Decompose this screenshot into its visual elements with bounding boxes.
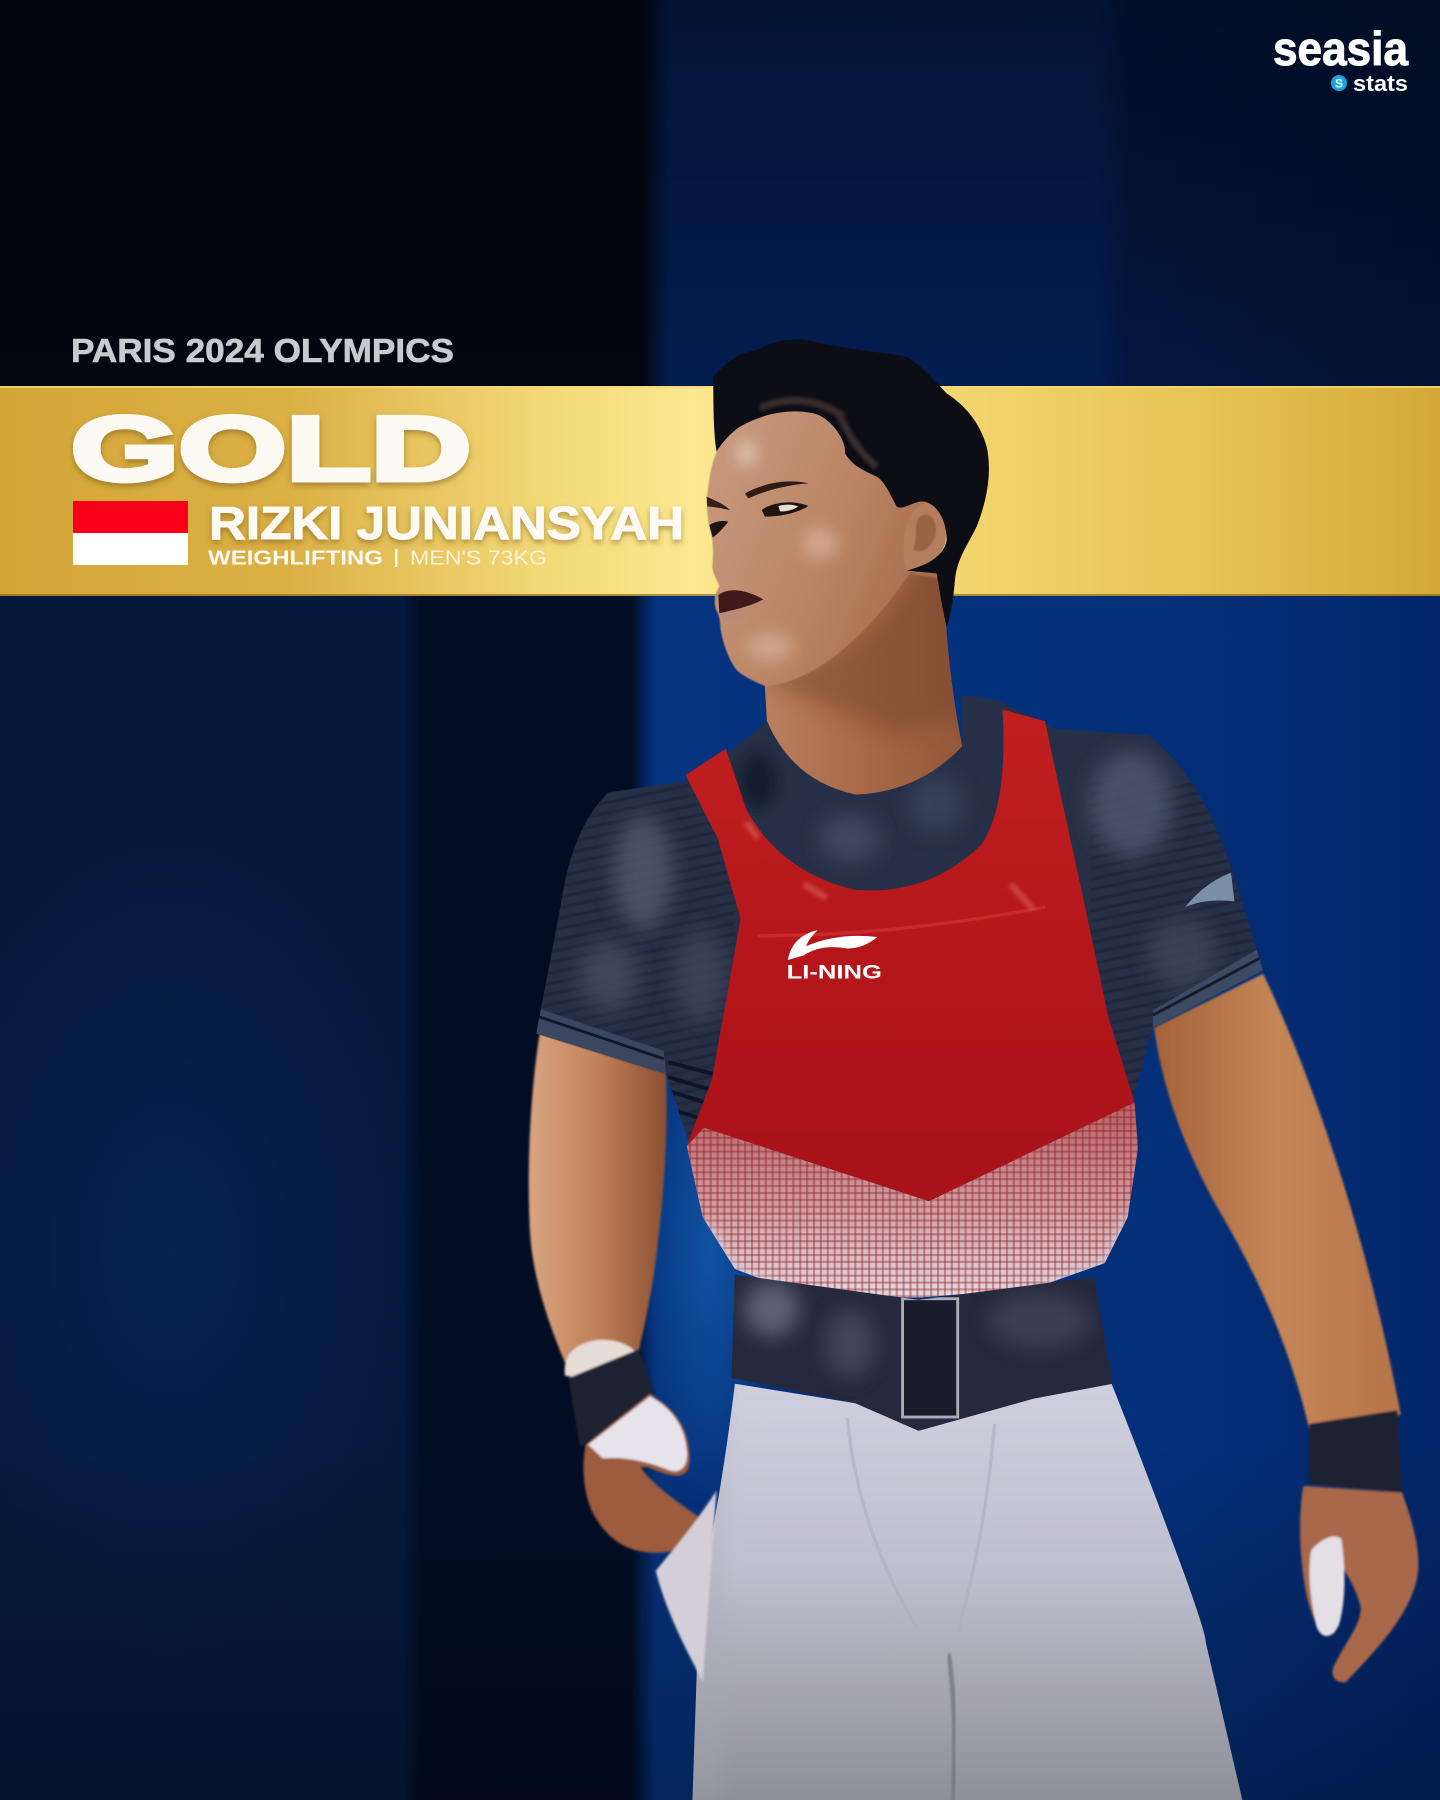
medal title: GOLD: GOLD bbox=[71, 399, 471, 500]
icon: Indonesian flag bbox=[73, 501, 188, 565]
face bbox=[707, 393, 947, 686]
compression shirt bbox=[536, 694, 1263, 1142]
event detail text bbox=[208, 546, 547, 570]
neck bbox=[764, 572, 962, 794]
athlete name: RIZKI JUNIANSYAH bbox=[209, 497, 684, 549]
lifting belt bbox=[723, 1269, 1120, 1435]
brand logo on singlet bbox=[787, 930, 882, 983]
arm: athlete's right bbox=[529, 1033, 714, 1553]
athlete figure bbox=[517, 339, 1418, 1800]
head bbox=[707, 339, 989, 686]
leggings bbox=[677, 1378, 1263, 1800]
logo: seasia stats: stats bbox=[1353, 71, 1408, 96]
event detail text: MEN'S 73KG bbox=[410, 546, 547, 570]
event detail text: WEIGHLIFTING bbox=[208, 546, 383, 570]
hair bbox=[713, 339, 989, 627]
pocket cloth bbox=[656, 1490, 717, 1682]
logo: seasia stats bbox=[1273, 22, 1409, 96]
logo: seasia stats: S bbox=[1335, 76, 1343, 90]
arm: athlete's left bbox=[1154, 974, 1418, 1682]
ear bbox=[904, 501, 946, 571]
mouth bbox=[718, 590, 763, 622]
eye and brows bbox=[707, 481, 808, 537]
mesh singlet panel bbox=[677, 1097, 1143, 1303]
gold band bbox=[0, 386, 1440, 596]
logo: seasia stats: seasia bbox=[1273, 22, 1409, 75]
red singlet bbox=[686, 710, 1135, 1201]
brand logo on singlet: LI-NING bbox=[787, 961, 882, 983]
event heading: PARIS 2024 OLYMPICS bbox=[71, 332, 454, 369]
